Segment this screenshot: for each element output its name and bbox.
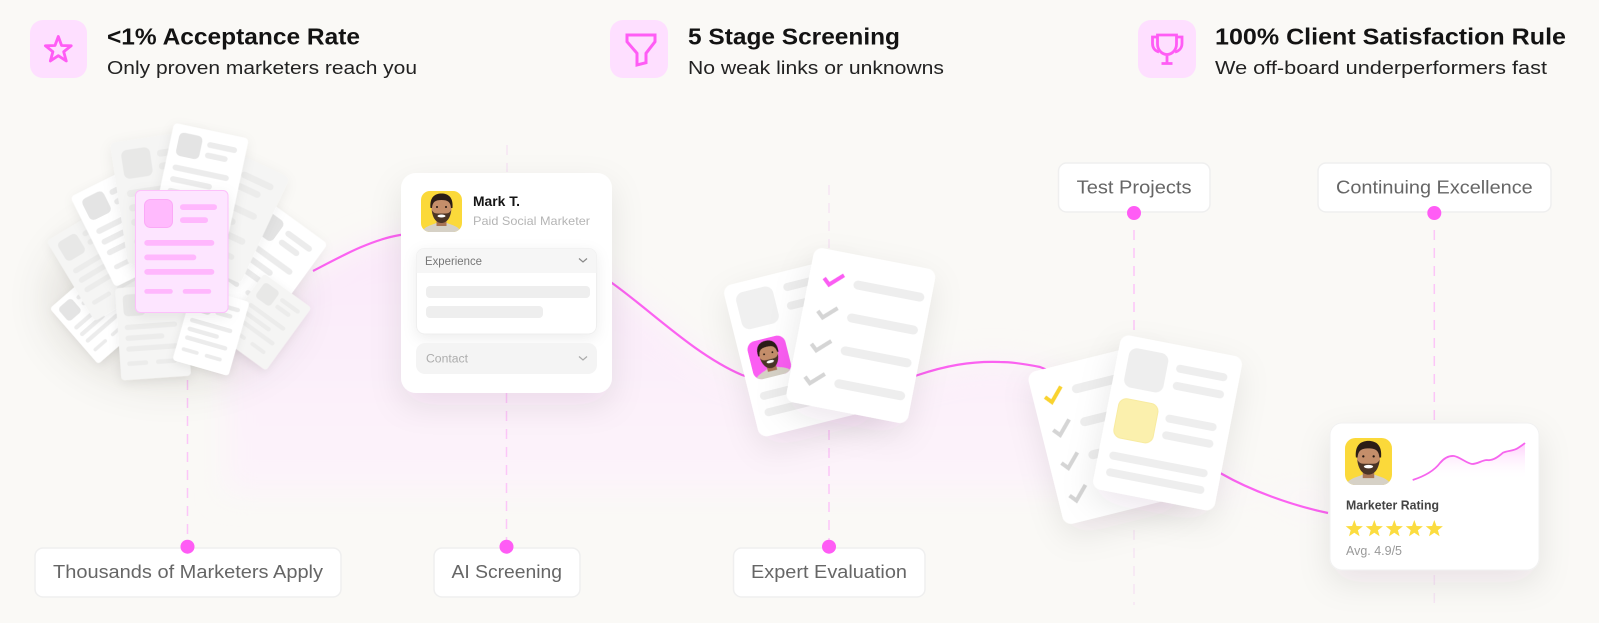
- dashed connector lines: [188, 145, 1434, 605]
- icon: funnel: [610, 20, 668, 78]
- back resume card: [722, 257, 880, 438]
- illustration: test project cards: [1027, 334, 1243, 526]
- line chart: [1413, 443, 1525, 480]
- icon: trophy: [1138, 20, 1196, 78]
- heading: acceptance rate: <1% Acceptance Rate: [107, 24, 360, 50]
- panel: marketer rating card: [1330, 423, 1539, 570]
- resume card: [1092, 334, 1243, 512]
- illustration: expert evaluation cards: [722, 247, 937, 438]
- accordion: contact: [416, 343, 597, 374]
- avatar: [1345, 438, 1392, 485]
- label: continuing excellence: Continuing Excellence: [1336, 178, 1533, 198]
- text: screening note: No weak links or unknowns: [688, 57, 944, 78]
- rating title: Marketer Rating: [1346, 498, 1439, 512]
- accordion: experience: [416, 248, 596, 334]
- pink area under curve: [225, 232, 1328, 513]
- stat: acceptance rate: [30, 20, 417, 78]
- name: Mark T.: [473, 194, 520, 209]
- icon: star: [30, 20, 87, 78]
- label: continuing excellence: [1318, 163, 1551, 220]
- text: acceptance rate note: Only proven marketers reach you: [107, 57, 417, 78]
- avatar: Mark T.: [421, 191, 462, 232]
- label: thousands of marketers apply: Thousands of Marketers Apply: [53, 562, 323, 582]
- label: test projects: Test Projects: [1077, 178, 1192, 198]
- process curve: [313, 232, 1328, 513]
- heading: satisfaction: 100% Client Satisfaction Rule: [1215, 24, 1566, 50]
- label: expert evaluation: [734, 540, 925, 597]
- role: Paid Social Marketer: [473, 214, 590, 228]
- label: thousands of marketers apply: [35, 540, 341, 597]
- average rating: Avg. 4.9/5: [1346, 544, 1402, 558]
- illustration: stack of resumes: [47, 123, 328, 380]
- checklist card: [785, 247, 937, 424]
- panel: AI screening profile card: [401, 173, 612, 393]
- label: AI screening: [434, 540, 580, 597]
- five stars: [1346, 520, 1443, 536]
- stat: five stage screening: [610, 20, 944, 78]
- text: satisfaction note: We off-board underperformers fast: [1215, 57, 1547, 78]
- pink highlighted resume: [136, 190, 228, 312]
- label: expert evaluation: Expert Evaluation: [751, 562, 907, 582]
- stat: client satisfaction: [1138, 20, 1566, 78]
- label: test projects: [1058, 163, 1210, 220]
- checklist card: [1027, 343, 1185, 526]
- heading: screening: 5 Stage Screening: [688, 24, 900, 50]
- accordion: experience: Experience: [425, 256, 482, 268]
- accordion: contact: Contact: [426, 354, 469, 366]
- label: AI screening: AI Screening: [452, 562, 562, 582]
